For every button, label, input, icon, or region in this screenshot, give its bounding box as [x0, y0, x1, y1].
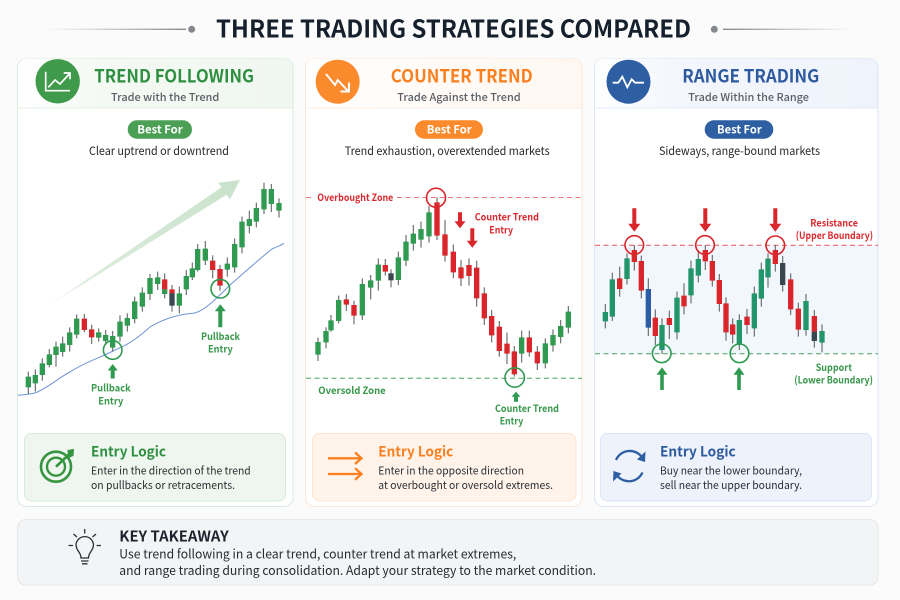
- candles: first half: [28, 274, 150, 394]
- text: key takeaway: Use trend following in a clear trend, counter trend at market extremes,: [119, 543, 516, 562]
- marker: first pullback circle: [103, 341, 122, 359]
- support line: [595, 353, 878, 355]
- label: second pullback entry: Pullback: [201, 328, 240, 343]
- heading: counter trend: COUNTER TREND: [391, 63, 533, 89]
- icon: light bulb: [68, 529, 101, 564]
- text: entry logic: Buy near the lower boundary,: [660, 462, 802, 478]
- chart: trend following candlesticks: [18, 180, 284, 407]
- marker: overbought circle: [426, 188, 446, 207]
- label: first pullback entry: Pullback: [91, 380, 131, 395]
- panel: key takeaway: [18, 520, 878, 585]
- candles: rising leg: [318, 197, 437, 361]
- label: green counter trend entry: Counter Trend: [495, 400, 559, 415]
- heading: trend following: TREND FOLLOWING: [94, 63, 254, 89]
- icon: rising chart: [36, 59, 80, 104]
- header band: trend following: [18, 58, 292, 108]
- subtitle: Trade Against the Trend: [397, 89, 521, 105]
- oversold line: [306, 377, 582, 379]
- resistance line: [595, 244, 878, 246]
- marker: oversold circle: [505, 368, 524, 387]
- header band: counter trend: [306, 58, 582, 108]
- candles: first swings: [605, 245, 733, 354]
- icon: double arrows: [328, 452, 362, 480]
- best-for description: Sideways, range-bound markets: [659, 143, 820, 159]
- subtitle: Trade Within the Range: [688, 89, 809, 105]
- panel: trend following: [18, 58, 293, 506]
- text: entry logic: on pullbacks or retracements.: [91, 477, 235, 493]
- chart: range trading candlesticks: [595, 208, 878, 390]
- arrow: second pullback: [215, 304, 226, 327]
- text: entry logic: sell near the upper boundary.: [660, 477, 802, 493]
- entry logic box: range trading: [600, 434, 872, 501]
- text: key takeaway: and range trading during consolidation. Adapt your strategy to the market condition.: [119, 560, 596, 579]
- label: overbought zone: Overbought Zone: [317, 189, 393, 204]
- label: first pullback entry: Entry: [98, 392, 124, 407]
- label: resistance: (Upper Boundary): [796, 227, 873, 242]
- panel: counter trend: [306, 58, 582, 506]
- panel: range trading: [594, 58, 878, 506]
- arrow: green upward: [512, 392, 520, 402]
- entry logic box: counter trend: [312, 434, 576, 501]
- label: red counter trend entry: Entry: [489, 221, 513, 236]
- heading: key takeaway: KEY TAKEAWAY: [119, 526, 229, 547]
- range band: [595, 245, 878, 354]
- arrows: green upward: [656, 367, 744, 390]
- arrow: big uptrend: [48, 180, 240, 306]
- moving average line: [18, 243, 284, 395]
- candles: last swing: [739, 245, 822, 352]
- title: THREE TRADING STRATEGIES COMPARED: [216, 9, 691, 44]
- candles: falling leg and recovery: [445, 220, 568, 377]
- arrow: first pullback: [108, 364, 118, 378]
- badge: best for: [705, 120, 773, 139]
- icon: cycle arrows: [613, 451, 646, 482]
- entry logic box: trend following: [24, 434, 286, 501]
- label: support: Support: [816, 359, 853, 374]
- text: entry logic: Enter in the direction of the trend: [91, 462, 251, 478]
- label: red counter trend entry: Counter Trend: [475, 208, 539, 223]
- best-for description: Clear uptrend or downtrend: [89, 143, 229, 159]
- header band: range trading: [595, 58, 878, 108]
- heading: range trading: RANGE TRADING: [682, 63, 819, 89]
- best-for description: Trend exhaustion, overextended markets: [345, 143, 550, 159]
- candles: second half: [158, 183, 279, 313]
- markers: resistance circles: [625, 236, 785, 255]
- badge: best for: [415, 120, 483, 139]
- badge: best for: Best For: [137, 121, 184, 137]
- icon: falling chart: [316, 60, 360, 104]
- heading: entry logic: Entry Logic: [660, 442, 736, 462]
- badge: best for: Best For: [717, 121, 763, 137]
- label: oversold zone: Oversold Zone: [318, 382, 386, 397]
- markers: support circles: [652, 344, 749, 363]
- overbought line: [306, 196, 582, 198]
- text: entry logic: at overbought or oversold extremes.: [378, 477, 553, 493]
- subtitle: Trade with the Trend: [111, 89, 219, 105]
- title: [45, 9, 854, 44]
- label: second pullback entry: Entry: [208, 341, 233, 356]
- heading: entry logic: Entry Logic: [378, 442, 453, 462]
- label: green counter trend entry: Entry: [500, 412, 524, 427]
- marker: second pullback circle: [211, 279, 230, 298]
- arrows: red downward: [628, 208, 781, 232]
- heading: entry logic: Entry Logic: [91, 442, 166, 462]
- badge: best for: [128, 120, 192, 139]
- chart: counter trend candlesticks: [306, 188, 582, 427]
- label: resistance: Resistance: [810, 214, 858, 229]
- icon: waveform: [606, 60, 650, 104]
- text: entry logic: Enter in the opposite direction: [378, 462, 524, 478]
- label: support: (Lower Boundary): [794, 372, 873, 387]
- icon: target: [41, 450, 74, 482]
- arrows: red downward: [454, 212, 478, 248]
- badge: best for: Best For: [427, 121, 473, 137]
